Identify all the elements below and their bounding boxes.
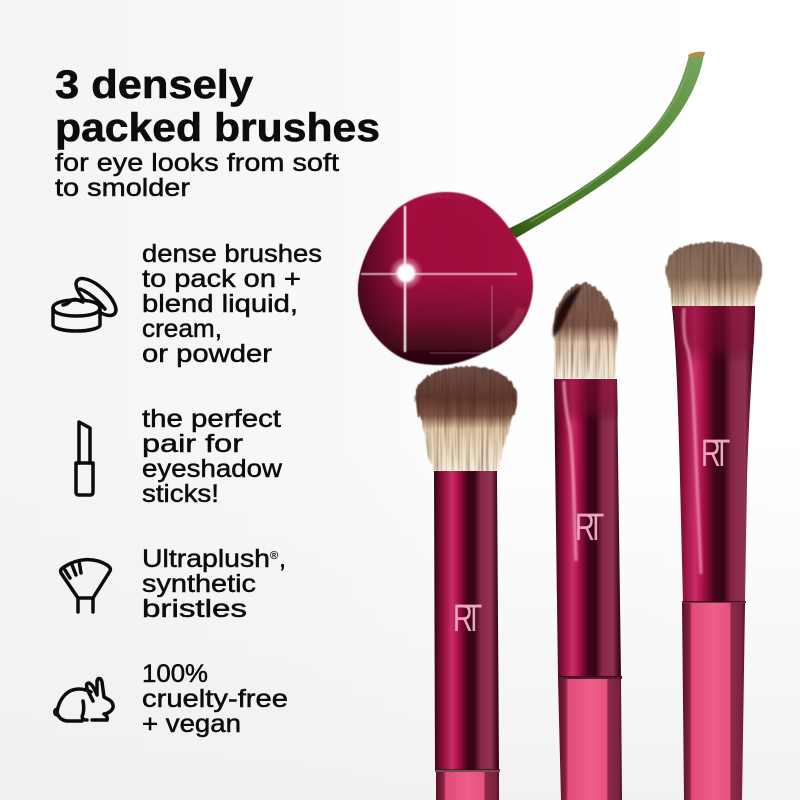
- text: Ultraplush: synthetic: [142, 570, 256, 598]
- icon: cream jar: [53, 272, 122, 331]
- text: cruelty-free: [142, 660, 288, 738]
- text: dense brushes: blend liquid,: [142, 290, 298, 318]
- sparkle: [361, 206, 517, 353]
- cherry: [358, 192, 533, 365]
- text: dense brushes: cream,: [142, 315, 222, 343]
- text: Ultraplush: bristles: [142, 595, 247, 623]
- text: cruelty-free: cruelty-free: [142, 685, 288, 713]
- icon: fan brush: [61, 560, 110, 612]
- text: perfect pair: eyeshadow: [142, 455, 283, 483]
- icon: rabbit: [55, 678, 113, 721]
- text: Ultraplush: ,: [279, 545, 286, 573]
- brush 3: right: [665, 242, 762, 800]
- subtitle: to smolder: [55, 174, 190, 202]
- logo: RT: RT: [701, 433, 730, 475]
- text: Ultraplush: Ultraplush: [142, 545, 270, 573]
- text: perfect pair: sticks!: [142, 480, 219, 508]
- title: [55, 63, 380, 150]
- title: packed brushes: [55, 106, 380, 150]
- text: perfect pair: pair for: [142, 430, 243, 458]
- brush 1: left: [415, 366, 518, 800]
- text: dense brushes: dense brushes: [142, 240, 322, 268]
- brush 2: middle: [553, 283, 622, 800]
- text: dense brushes: or powder: [142, 340, 272, 368]
- text: cruelty-free: 100%: [142, 660, 208, 688]
- logo: RT: RT: [453, 598, 482, 640]
- text: cruelty-free: + vegan: [142, 710, 241, 738]
- text: Ultraplush: ®: [270, 550, 278, 562]
- title: 3 densely: [55, 63, 254, 107]
- text: dense brushes: [142, 240, 322, 368]
- text: dense brushes: to pack on +: [142, 265, 301, 293]
- icon: lipstick: [76, 422, 93, 495]
- text: perfect pair: [142, 405, 283, 508]
- logo: RT: RT: [575, 507, 604, 549]
- subtitle: for eye looks from soft: [55, 149, 339, 177]
- cherry stem: [508, 52, 705, 238]
- subtitle: [55, 149, 339, 202]
- text: Ultraplush: [142, 545, 286, 623]
- text: perfect pair: the perfect: [142, 405, 281, 433]
